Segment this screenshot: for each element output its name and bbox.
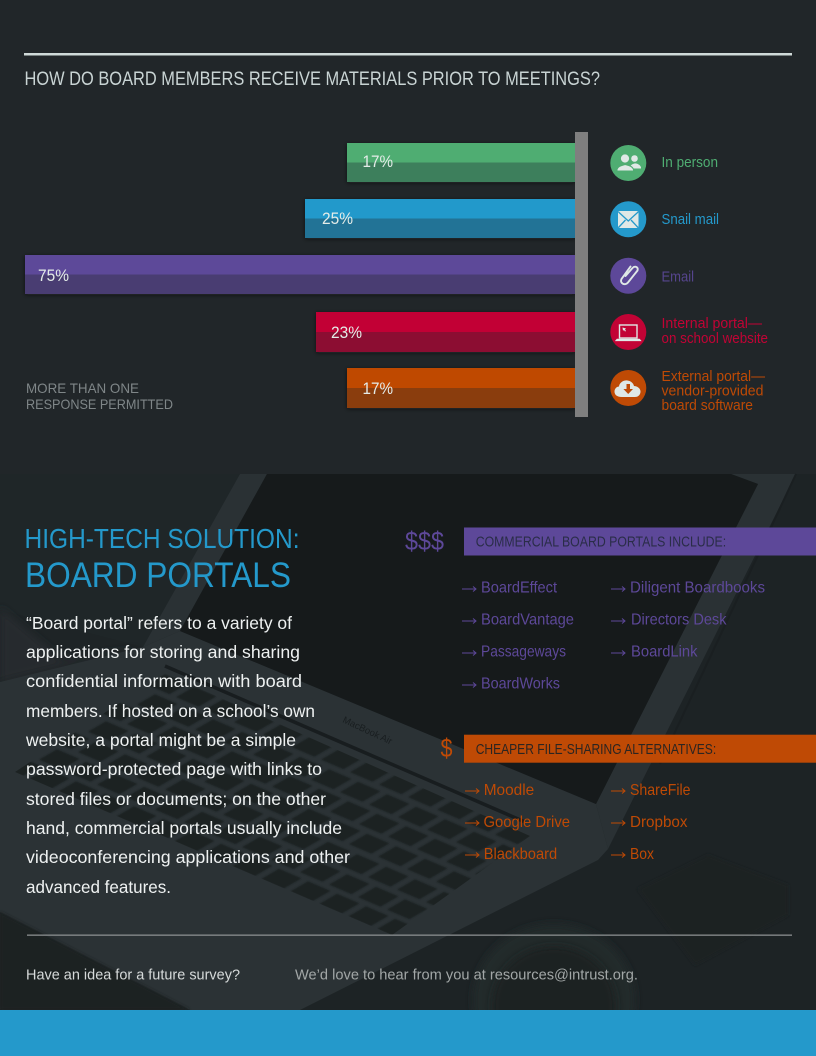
bar: email 75%: 75% <box>38 267 69 285</box>
icon: three dollar signs: $$$ <box>405 526 444 556</box>
label: internal portal: on school website <box>662 331 768 347</box>
icon: cloud download <box>610 370 646 406</box>
body text: board portal description: members. If hosted on a school’s own <box>26 701 315 721</box>
label: external portal: board software <box>662 398 753 414</box>
commercial portals list: Directors Desk <box>631 612 727 628</box>
label: email: Email <box>662 270 694 286</box>
alternatives list: Moodle <box>484 782 534 799</box>
note: more than one response <box>26 380 173 412</box>
keyboard keys <box>2 675 563 938</box>
alternatives list: Blackboard <box>484 846 557 863</box>
commercial portals header bar: COMMERCIAL BOARD PORTALS INCLUDE: <box>476 535 726 551</box>
footer rule <box>27 934 792 936</box>
alternatives list: ShareFile <box>630 782 691 799</box>
note: more than one response: MORE THAN ONE <box>26 380 139 396</box>
icon: people <box>610 145 646 181</box>
label: external portal: vendor-provided <box>662 384 764 400</box>
commercial portals header bar <box>464 528 816 556</box>
bar: email 75% <box>25 255 575 294</box>
body text: board portal description: videoconferencing applications and other <box>26 847 350 867</box>
alternatives list: Box <box>630 846 654 863</box>
bar: external portal 17% <box>347 368 575 408</box>
label: internal portal: Internal portal— <box>662 316 762 332</box>
bar: snail mail 25% <box>305 199 575 238</box>
commercial portals list: Diligent Boardbooks <box>630 580 765 596</box>
bar chart <box>25 132 588 417</box>
body text: board portal description: confidential information with board <box>26 671 302 691</box>
note: more than one response: RESPONSE PERMITTED <box>26 396 173 412</box>
chart axis <box>575 132 588 417</box>
bar: in person 17%: 17% <box>362 153 393 171</box>
bar: snail mail 25%: 25% <box>322 210 353 228</box>
alternatives list: Dropbox <box>630 814 688 831</box>
body text: board portal description: advanced features. <box>26 877 171 897</box>
top rule <box>24 53 792 56</box>
commercial portals list: BoardEffect <box>481 580 558 596</box>
panel: cheaper file-sharing alternatives <box>440 733 816 863</box>
bar: external portal 17%: 17% <box>362 380 393 398</box>
heading: high-tech solution: HIGH-TECH SOLUTION: <box>24 523 300 554</box>
label: internal portal <box>662 316 768 347</box>
bar: in person 17% <box>347 143 575 182</box>
alternatives header bar <box>464 735 816 763</box>
laptop brand label: MacBook Air <box>341 715 394 747</box>
label: snail mail: Snail mail <box>662 212 719 228</box>
icon: envelope <box>610 201 646 237</box>
top panel background <box>0 0 816 474</box>
body text: board portal description: applications for storing and sharing <box>26 642 300 662</box>
body text: board portal description <box>25 613 350 897</box>
commercial portals list <box>462 580 765 692</box>
body text: board portal description: website, a portal might be a simple <box>25 730 296 750</box>
background photo: laptop on desk <box>0 474 796 1010</box>
label: external portal: External portal— <box>662 369 765 385</box>
commercial portals list: BoardVantage <box>481 612 574 628</box>
footer: survey prompt: Have an idea for a future survey? <box>26 966 240 984</box>
label: external portal <box>662 369 765 414</box>
heading: high-tech solution: BOARD PORTALS <box>25 556 291 595</box>
alternatives list: Google Drive <box>484 814 570 831</box>
footer: contact line: We’d love to hear from you at resources@intrust.org. <box>295 966 638 984</box>
bar: internal portal 23%: 23% <box>331 324 362 342</box>
icon: laptop <box>610 314 646 350</box>
icon: dollar sign: $ <box>440 733 453 763</box>
alternatives header bar: CHEAPER FILE-SHARING ALTERNATIVES: <box>476 742 716 758</box>
panel: commercial board portals <box>405 526 816 692</box>
survey question heading: HOW DO BOARD MEMBERS RECEIVE MATERIALS PRIOR TO MEETINGS? <box>24 69 600 90</box>
icon: paperclip <box>610 258 646 294</box>
bottom blue band <box>0 1010 816 1056</box>
heading: high-tech solution <box>24 523 300 595</box>
commercial portals list: Passageways <box>481 644 566 660</box>
alternatives list <box>465 782 691 863</box>
legend <box>610 145 768 414</box>
body text: board portal description: password-protected page with links to <box>26 759 322 779</box>
body text: board portal description: stored files or documents; on the other <box>26 789 326 809</box>
body text: board portal description: “Board portal” refers to a variety of <box>26 613 292 633</box>
bar: internal portal 23% <box>316 312 575 352</box>
commercial portals list: BoardLink <box>631 644 698 660</box>
label: in person: In person <box>662 155 718 171</box>
body text: board portal description: hand, commercial portals usually include <box>26 818 342 838</box>
commercial portals list: BoardWorks <box>481 676 560 692</box>
